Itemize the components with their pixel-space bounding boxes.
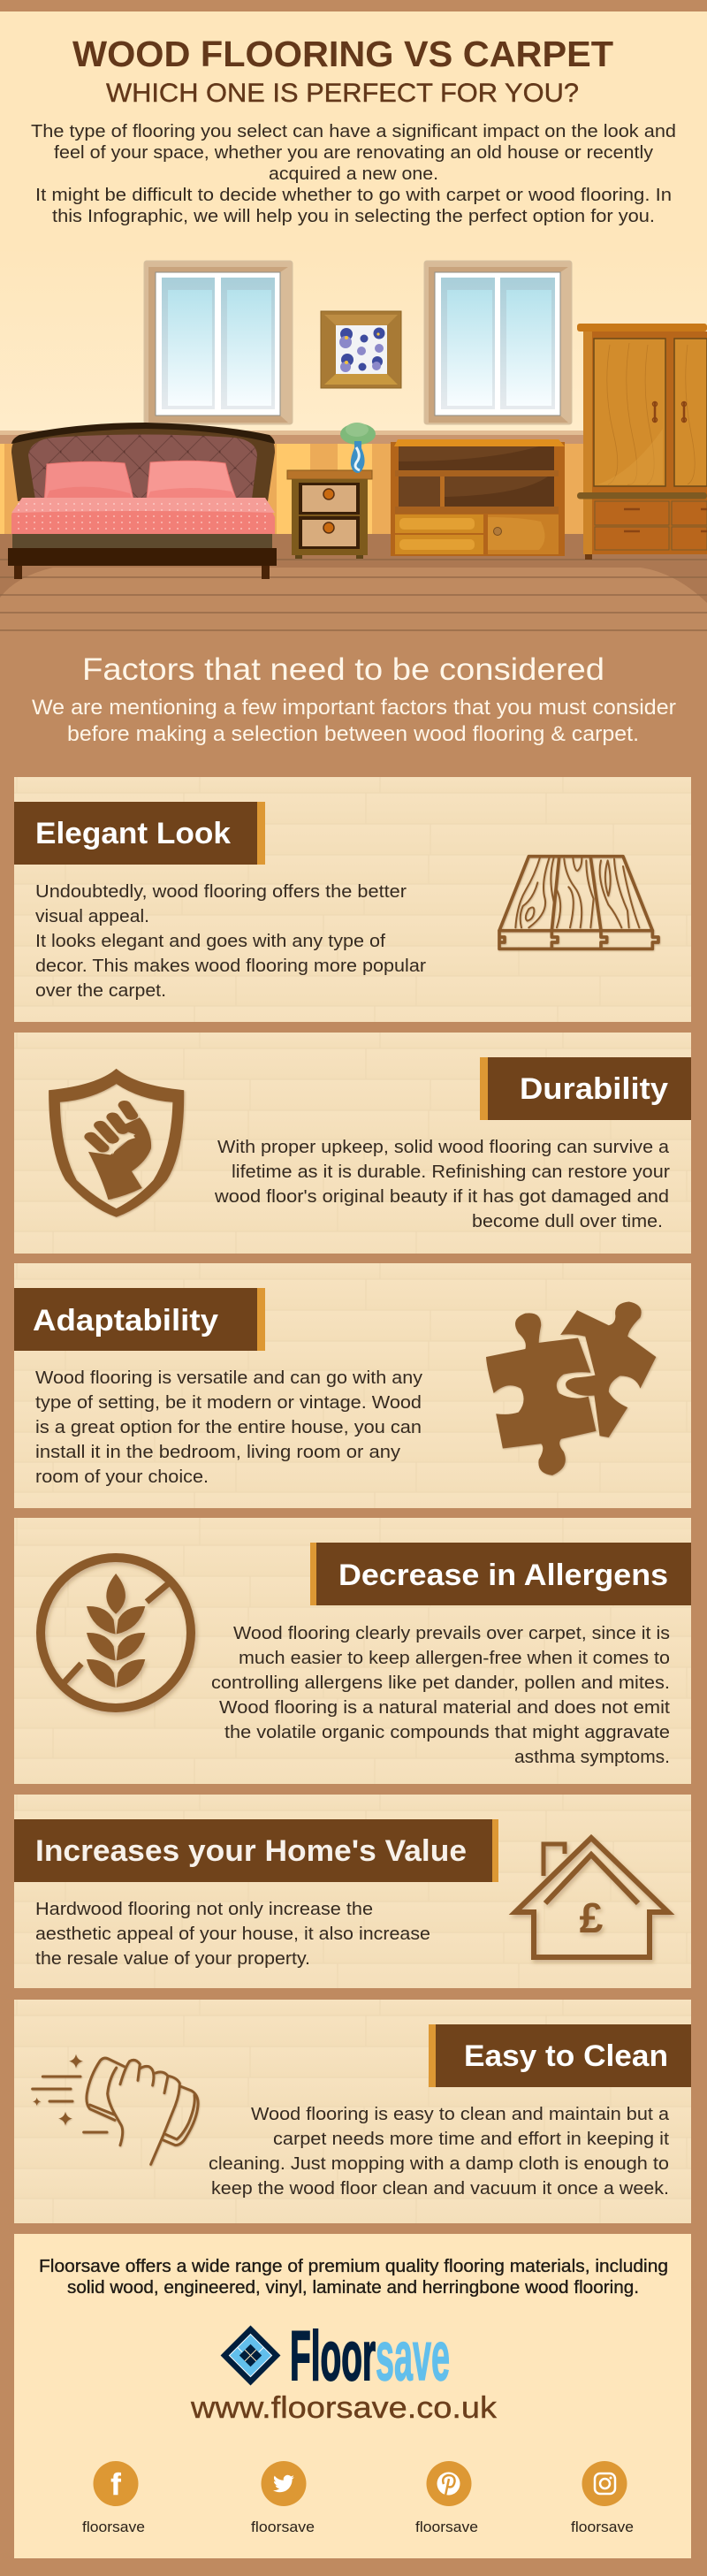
heading bar: home value: Increases your Home's Value [35, 1834, 467, 1868]
social: facebook: floorsave [82, 2519, 145, 2535]
window left [144, 261, 293, 424]
text: adaptability [35, 1368, 422, 1487]
wall wainscot rail [0, 431, 707, 444]
heading bar: easy to clean [429, 2024, 691, 2087]
text: easy to clean: carpet needs more time and effort in keeping it [273, 2130, 669, 2149]
text: adaptability: is a great option for the entire house, you can [35, 1418, 422, 1437]
text: easy to clean: cleaning. Just mopping with a damp cloth is enough to [209, 2154, 669, 2174]
text: home value: Hardwood flooring not only increase the [35, 1900, 373, 1919]
heading bar: elegant look: Elegant Look [35, 817, 231, 850]
social: pinterest [415, 2461, 478, 2535]
text: home value: aesthetic appeal of your house, it also increase [35, 1924, 430, 1944]
illustration: bedroom scene [0, 261, 707, 631]
text: elegant look: It looks elegant and goes with any type of [35, 932, 385, 951]
text: durability [214, 1138, 670, 1231]
title: WOOD FLOORING VS CARPET [72, 34, 613, 74]
heading bar: durability [480, 1057, 691, 1120]
footer statement [39, 2257, 668, 2298]
intro text: The type of flooring you select can have a significant impact on the look and [31, 122, 676, 141]
text: adaptability: type of setting, be it modern or vintage. Wood [35, 1393, 422, 1413]
text: elegant look: decor. This makes wood flooring more popular [35, 956, 426, 976]
section intro [32, 696, 676, 746]
text: durability: With proper upkeep, solid wood flooring can survive a [217, 1138, 670, 1157]
intro text: It might be difficult to decide whether to go with carpet or wood flooring. In [35, 186, 672, 205]
text: adaptability: Wood flooring is versatile and can go with any [35, 1368, 422, 1388]
panel: adaptability [14, 1263, 691, 1522]
social: twitter: floorsave [251, 2519, 315, 2535]
section heading: Factors that need to be considered [82, 652, 604, 687]
heading bar: adaptability: Adaptability [33, 1304, 218, 1338]
text: adaptability: room of your choice. [35, 1467, 209, 1487]
text: home value [35, 1900, 430, 1969]
logo: Floorsave: Floor [290, 2316, 376, 2395]
heading bar: allergens [310, 1543, 691, 1605]
text: allergens: asthma symptoms. [514, 1748, 670, 1767]
panel: footer [14, 2234, 691, 2558]
lower wall gradient [0, 248, 707, 431]
heading bar: allergens: Decrease in Allergens [338, 1559, 668, 1592]
text: easy to clean: Wood flooring is easy to clean and maintain but a [251, 2105, 670, 2124]
intro text: acquired a new one. [269, 164, 438, 184]
text: durability: lifetime as it is durable. Refinishing can restore your [232, 1162, 670, 1182]
logo: Floorsave [221, 2316, 450, 2395]
text: easy to clean [209, 2105, 670, 2199]
social: facebook [82, 2461, 145, 2535]
icon: wood planks [499, 857, 658, 949]
text: allergens: Wood flooring clearly prevails over carpet, since it is [233, 1624, 670, 1643]
flower vase [340, 423, 376, 473]
text: elegant look: visual appeal. [35, 907, 149, 926]
icon: house with pound sign: £ [580, 1895, 604, 1942]
shelving cabinet [391, 439, 565, 556]
panel: footer: save [376, 2316, 450, 2395]
intro text: feel of your space, whether you are renovating an old house or recently [54, 143, 653, 163]
heading bar: home value [14, 1819, 498, 1882]
footer statement: solid wood, engineered, vinyl, laminate and herringbone wood flooring. [67, 2278, 639, 2298]
text: allergens [211, 1624, 670, 1767]
text: home value: the resale value of your property. [35, 1949, 310, 1969]
top wall background [0, 11, 707, 431]
heading bar: durability: Durability [520, 1072, 668, 1106]
panel: home value [14, 1795, 691, 2054]
social: pinterest: floorsave [415, 2519, 478, 2535]
text: durability: become dull over time. [472, 1212, 663, 1231]
intro text: this Infographic, we will help you in selecting the perfect option for you. [52, 207, 655, 226]
striped lower wall [0, 444, 707, 534]
website url: www.floorsave.co.uk [190, 2391, 498, 2425]
text: easy to clean: keep the wood floor clean and vacuum it once a week. [211, 2179, 669, 2199]
text: allergens: controlling allergens like pet dander, pollen and mites. [211, 1673, 670, 1693]
text: allergens: much easier to keep allergen-free when it comes to [239, 1649, 670, 1668]
section intro: We are mentioning a few important factors that you must consider [32, 696, 676, 720]
section intro: before making a selection between wood flooring & carpet. [67, 722, 639, 746]
framed flower picture [321, 311, 401, 388]
subtitle: WHICH ONE IS PERFECT FOR YOU? [106, 79, 579, 108]
icon: hand wiping [33, 2054, 198, 2164]
intro text [31, 122, 676, 226]
icon: house with pound sign [515, 1838, 668, 1957]
text: allergens: Wood flooring is a natural material and does not emit [219, 1698, 670, 1718]
wardrobe [577, 324, 707, 560]
heading bar: elegant look [14, 802, 265, 865]
panel: easy to clean [14, 2000, 691, 2259]
bed [8, 423, 277, 579]
text: elegant look: over the carpet. [35, 981, 166, 1001]
heading bar: adaptability [14, 1288, 265, 1351]
heading bar: easy to clean: Easy to Clean [464, 2039, 668, 2073]
icon: no wheat [41, 1558, 191, 1708]
icon: puzzle pieces [486, 1301, 656, 1475]
floor [0, 534, 707, 631]
text: durability: wood floor's original beauty if it has got damaged and [214, 1187, 669, 1207]
social: instagram [571, 2461, 634, 2535]
panel: decrease in allergens [14, 1518, 691, 1788]
nightstand [287, 470, 372, 559]
text: allergens: the volatile organic compounds that might aggravate [224, 1723, 670, 1742]
social: twitter [251, 2461, 315, 2535]
social: facebook: f [110, 2468, 121, 2502]
footer statement: Floorsave offers a wide range of premium quality flooring materials, including [39, 2257, 668, 2276]
panel: durability [14, 1033, 691, 1292]
icon: shield with fist [49, 1069, 184, 1217]
panel: elegant look [14, 777, 691, 1036]
text: elegant look [35, 882, 426, 1001]
text: adaptability: install it in the bedroom, living room or any [35, 1443, 400, 1462]
text: elegant look: Undoubtedly, wood flooring offers the better [35, 882, 407, 902]
social: instagram: floorsave [571, 2519, 634, 2535]
window right [424, 261, 572, 424]
